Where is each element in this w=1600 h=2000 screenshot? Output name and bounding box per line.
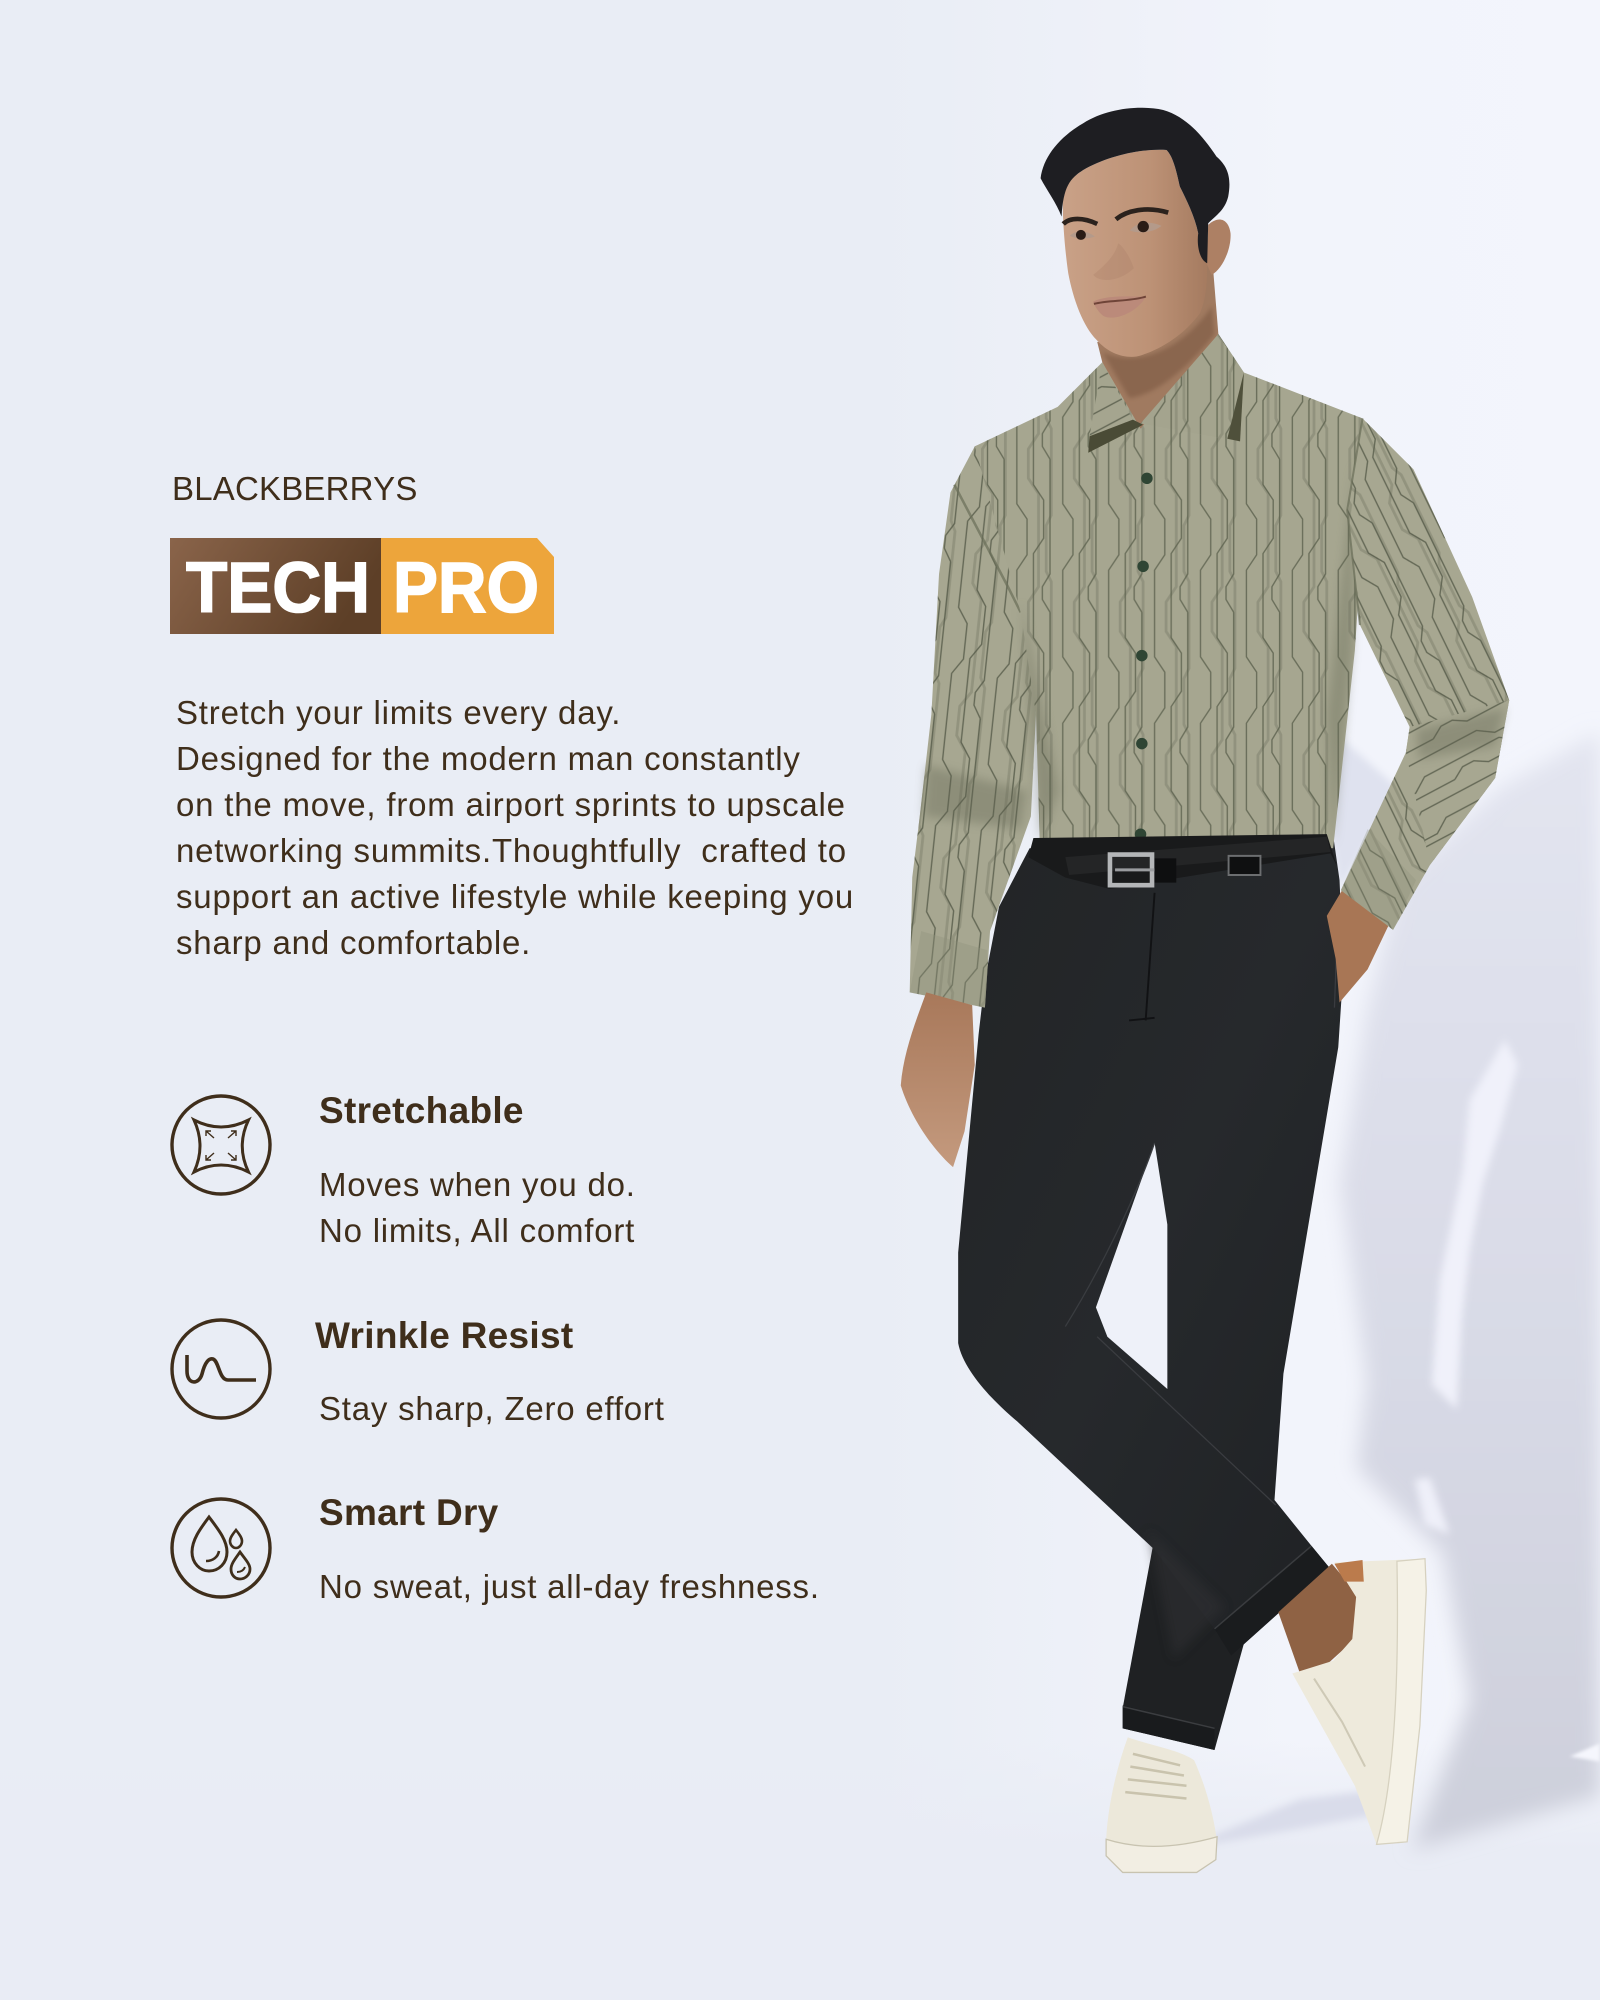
shirt collar [1088,334,1244,453]
icon: smart dry water drops [170,1497,272,1599]
intro paragraph: on the move, from airport sprints to upscale [176,786,846,823]
standing shoe [1106,1737,1217,1872]
belt and buckle [1028,834,1337,889]
face [1063,150,1207,357]
text: Smart Dry description: No sweat, just all-day freshness. [319,1568,820,1605]
intro paragraph: Designed for the modern man constantly [176,740,801,777]
neck [1097,255,1218,429]
shirt left sleeve [910,434,1036,1008]
trousers [958,835,1343,1658]
raised foot ankle [1278,1564,1360,1673]
hair [1041,108,1229,263]
head [1041,108,1231,357]
text: Wrinkle Resist description: Stay sharp, Zero effort [319,1390,665,1427]
shirt right sleeve [1341,418,1509,930]
shirt torso [975,334,1362,848]
icon: stretch fabric [170,1094,272,1196]
left hand [901,992,975,1167]
icon: wrinkle resist [170,1318,272,1420]
text: Stretchable description: No limits, All comfort [319,1212,635,1249]
nose [1093,243,1134,280]
text: Stretchable description: Moves when you do. [319,1166,636,1203]
Tech Pro logo [170,538,554,634]
ear [1207,219,1231,275]
lower standing leg [1123,1537,1245,1750]
lips [1093,296,1146,318]
eyebrows [1063,209,1168,224]
text: Stretchable description [319,1166,636,1249]
intro paragraph: sharp and comfortable. [176,924,531,961]
intro paragraph [176,694,854,961]
shirt buttons [1135,473,1153,840]
heading: Smart Dry: Smart Dry [319,1492,499,1533]
heading: Stretchable: Stretchable [319,1090,524,1131]
right hand in pocket [1327,890,1393,1003]
heading: Wrinkle Resist: Wrinkle Resist [315,1315,574,1356]
brand name: BLACKBERRYS [172,470,418,507]
Tech Pro logo: TECH [186,549,370,628]
intro paragraph: networking summits.Thoughtfully crafted to [176,832,847,869]
eyes [1070,223,1162,239]
intro paragraph: Stretch your limits every day. [176,694,621,731]
wall shadow and light patches [1180,720,1600,1849]
Tech Pro logo: PRO [393,549,539,628]
intro paragraph: support an active lifestyle while keeping you [176,878,854,915]
raised shoe [1292,1559,1426,1844]
